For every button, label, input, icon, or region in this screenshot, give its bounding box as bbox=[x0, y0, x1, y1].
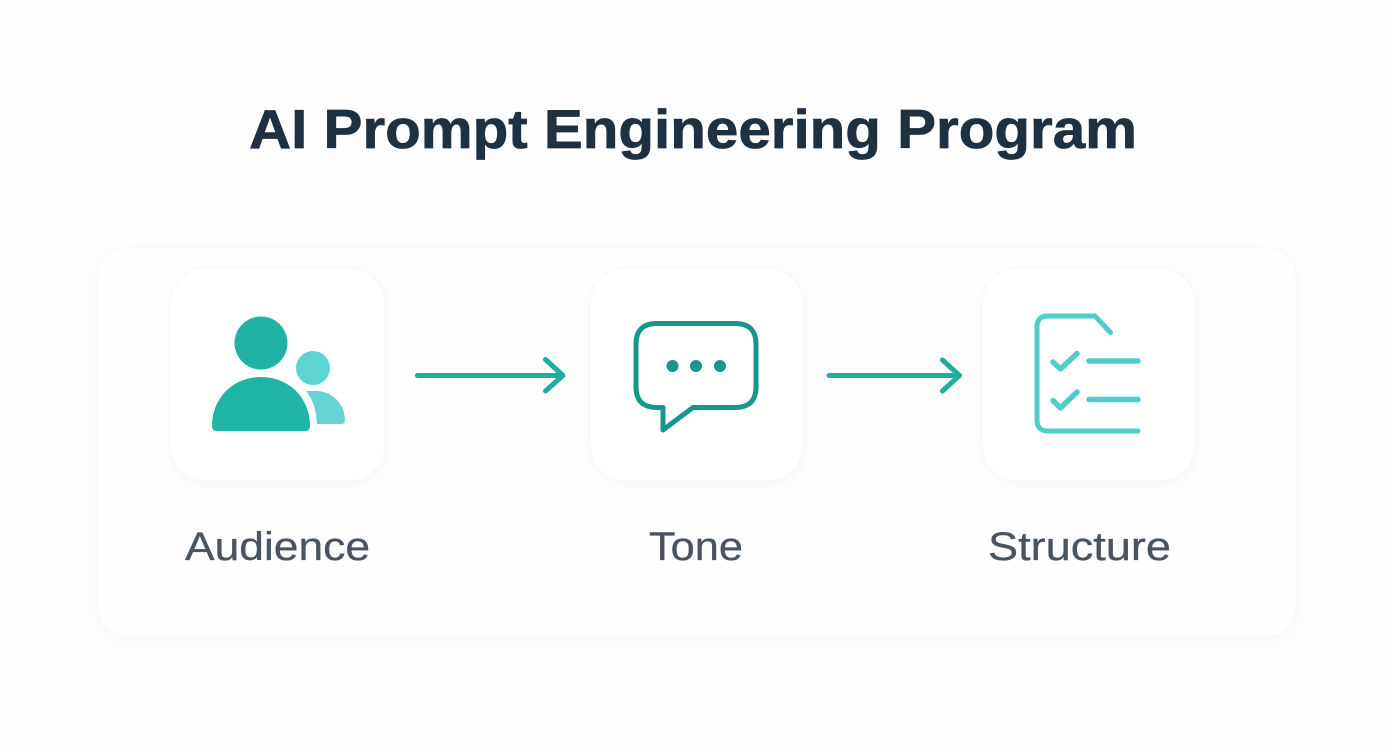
label: Structure: Structure bbox=[988, 525, 1171, 569]
icon: speech bubble bbox=[636, 324, 756, 430]
card: Audience bbox=[170, 268, 385, 481]
arrow: Tone to Structure bbox=[829, 360, 960, 391]
arrow: Audience to Tone bbox=[418, 360, 563, 391]
panel: workflow container bbox=[98, 248, 1296, 636]
card: Tone bbox=[590, 268, 803, 481]
label: Audience: Audience bbox=[185, 525, 370, 569]
label: Tone: Tone bbox=[649, 525, 743, 569]
icon: audience people bbox=[212, 316, 345, 431]
card: Structure bbox=[982, 268, 1195, 481]
title: AI Prompt Engineering Program bbox=[249, 99, 1137, 160]
icon: checklist document bbox=[1037, 316, 1138, 431]
